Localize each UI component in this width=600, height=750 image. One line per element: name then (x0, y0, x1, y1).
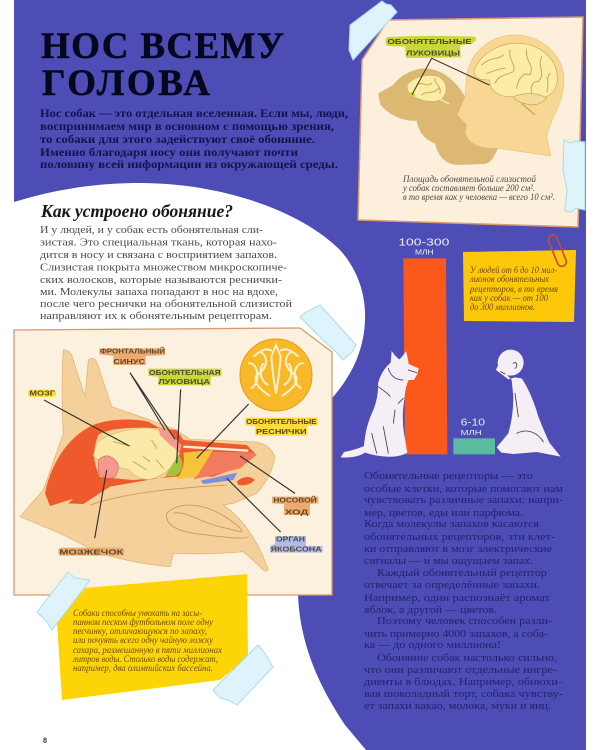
right column text: что они различают отдельные ингре- (364, 664, 557, 676)
pointer lines (412, 58, 489, 95)
note: receptors callout: как у собак — от 100 (470, 293, 548, 303)
right column text: Например, один распознаёт аромат (364, 592, 550, 604)
label: frontal sinus: СИНУС (113, 359, 145, 366)
right column text: ка — до одного миллиона! (364, 639, 501, 651)
label: vomeronasal organ: ЯКОБСОНА (271, 547, 322, 554)
label: olfactory cilia (245, 418, 318, 436)
right column text: Каждый обонятельный рецептор (377, 567, 548, 579)
label: nasal passage (272, 495, 318, 516)
dog head silhouette (378, 68, 498, 165)
label: frontal sinus (99, 346, 165, 366)
label: olfactory cilia: ОБОНЯТЕЛЬНЫЕ (246, 419, 317, 426)
right column text: ет запахи какао, молока, муки и яиц. (364, 700, 551, 712)
brain (93, 428, 177, 479)
dog silhouette (20, 350, 275, 571)
dog bar value: МЛН (415, 248, 434, 257)
label: olfactory bulb: ЛУКОВИЦА (158, 379, 210, 386)
section body text (40, 224, 292, 322)
right column text: особые клетки, которые помогают нам (364, 483, 563, 495)
right column text: сигналы — и мы ощущаем запах. (364, 555, 533, 567)
human bar value: 6-10 (461, 418, 485, 429)
tape: note right (213, 645, 273, 705)
label: olfactory bulb: ОБОНЯТЕЛЬНАЯ (149, 370, 221, 377)
section body text: ских волосков, которые называются реснички- (40, 274, 282, 286)
label: vomeronasal organ: ОРГАН (276, 537, 305, 544)
magnified cilia circle (240, 339, 312, 411)
label: brain: МОЗГ (29, 391, 55, 398)
right column text: диенты в блюдах. Например, обнюхи- (364, 676, 562, 688)
right column text: Обоняние собак настолько сильно, (377, 652, 557, 664)
human brain (474, 43, 557, 115)
right column text: обонятельных рецепторов, эти клет- (364, 531, 555, 543)
human bar (453, 438, 495, 454)
label: nasal passage: ХОД (285, 509, 308, 516)
frontal sinus (158, 427, 182, 452)
label: vomeronasal organ (270, 536, 323, 554)
cilia area (177, 450, 213, 479)
jaw and mouth lines (90, 485, 248, 538)
caption (402, 174, 555, 203)
tape: right (563, 140, 585, 212)
dog bar (403, 258, 447, 454)
caption: у собак составляет больше 200 см². (402, 183, 535, 194)
section body text: зистая. Это специальная ткань, которая нахо- (40, 236, 277, 248)
label: nasal passage: НОСОВОЙ (273, 495, 317, 504)
right column text: чувствовать различные запахи: напри- (364, 494, 563, 506)
red skull cavity (45, 419, 160, 506)
human bar value (461, 418, 485, 437)
dog bar value (398, 237, 450, 257)
tape: panel top (300, 305, 356, 360)
red lower tract (68, 428, 257, 504)
label: cerebellum (58, 548, 124, 557)
page number: 8 (43, 736, 47, 745)
human bar value: МЛН (461, 428, 482, 437)
callout: yellow fact note: или почуять всего одну чайную ложку (73, 635, 214, 646)
callout: yellow fact note: например, два олимпийских бассейна. (73, 663, 213, 674)
section body text: дится в носу и связана с восприятием запахов. (40, 249, 277, 261)
panel: dog anatomy (14, 328, 332, 595)
section heading: Как устроено обоняние? (40, 201, 233, 221)
intro text (40, 107, 348, 171)
right column text: Когда молекулы запахов касаются (364, 518, 539, 530)
callout: yellow fact note: Собаки способны унюхать на засы- (73, 608, 202, 619)
section body text: направляют их к обонятельным рецепторам. (40, 310, 272, 322)
tape: top (349, 1, 397, 60)
label: olfactory bulbs: ЛУКОВИЦЫ (406, 49, 460, 58)
icon: kneeling human (496, 350, 561, 457)
intro text: половину всей информации из окружающей среды. (40, 158, 338, 171)
callout: yellow fact note: сахара, размешанную в пяти миллионах (73, 646, 223, 656)
intro text: то собаки для этого задействуют своё обоняние. (40, 133, 315, 146)
white nasal stripe (183, 447, 248, 451)
section body text: после чего реснички на обонятельной слизистой (40, 298, 292, 310)
section body text: И у людей, и у собак есть обонятельная сли- (40, 224, 263, 236)
right column text: Поэтому человек способен разли- (377, 615, 552, 627)
intro text: Именно благодаря носу они получают почти (40, 146, 298, 159)
right column text: мер, цветов, еды или парфюма. (364, 507, 523, 519)
note: receptors callout: до 300 миллионов. (470, 302, 535, 312)
dog bar value: 100-300 (398, 237, 450, 248)
right column text: Обонятельные рецепторы — это (364, 470, 534, 482)
note: receptors callout: лионов обонятельных (469, 274, 550, 284)
section body text: Слизистая покрыта множеством микроскопиче- (40, 262, 287, 274)
right column text: чить примерно 4000 запахов, а соба- (364, 628, 548, 640)
label: brain (28, 390, 56, 398)
label: frontal sinus: ФРОНТАЛЬНЫЙ (100, 346, 165, 355)
icon: sitting dog (341, 351, 419, 457)
note: receptors callout: рецепторов, в то время (469, 284, 558, 294)
icon: paper clip (547, 234, 568, 268)
note: receptors callout: У людей от 6 до 10 мил- (470, 265, 557, 275)
right column text: яблок, а другой — цветов. (364, 604, 497, 616)
section body text: ми. Молекулы запаха попадают в нос на вдохе, (40, 286, 278, 298)
title (41, 26, 284, 104)
right column text: отвечает за определённые запахи. (364, 579, 540, 591)
panel: brain comparison (358, 17, 583, 227)
tape: note left (37, 572, 90, 630)
label: olfactory cilia: РЕСНИЧКИ (256, 429, 307, 436)
right column text: вая шоколадный торт, собака чувству- (364, 688, 563, 700)
white curved blob (14, 183, 366, 750)
human head silhouette (457, 35, 564, 156)
salmon nasal area (193, 452, 257, 479)
callout: yellow fact note (57, 574, 248, 700)
label: olfactory bulbs (385, 36, 476, 58)
cerebellum (98, 456, 118, 478)
label: olfactory bulb (148, 369, 221, 386)
callout: yellow fact note: литров воды. Столько воды содержат, (72, 654, 218, 665)
right column text (364, 470, 563, 712)
callout: yellow fact note: панном песком футбольном поле одну (73, 617, 214, 628)
title: ГОЛОВА (42, 63, 210, 104)
olfactory bulb (165, 455, 182, 477)
nostril (237, 477, 255, 485)
caption: в то время как у человека — всего 10 см². (403, 192, 555, 203)
dog brain (407, 75, 449, 104)
pointer lines (44, 373, 295, 538)
right column text: ки отправляют в мозг электрические (364, 543, 552, 555)
callout: yellow fact note: песчинку, отличающуюся по запаху, (73, 627, 207, 637)
title: НОС ВСЕМУ (41, 26, 284, 67)
label: cerebellum: МОЗЖЕЧОК (59, 548, 124, 557)
caption: Площадь обонятельной слизистой (402, 174, 536, 185)
label: olfactory bulbs: ОБОНЯТЕЛЬНЫЕ (387, 37, 472, 46)
intro text: Нос собак — это отдельная вселенная. Если мы, люди, (40, 107, 348, 120)
intro text: воспринимаем мир в основном с помощью зрения, (40, 120, 334, 133)
bar chart: receptors (341, 237, 561, 457)
vomeronasal organ (201, 473, 237, 484)
note: receptors callout (463, 250, 576, 322)
